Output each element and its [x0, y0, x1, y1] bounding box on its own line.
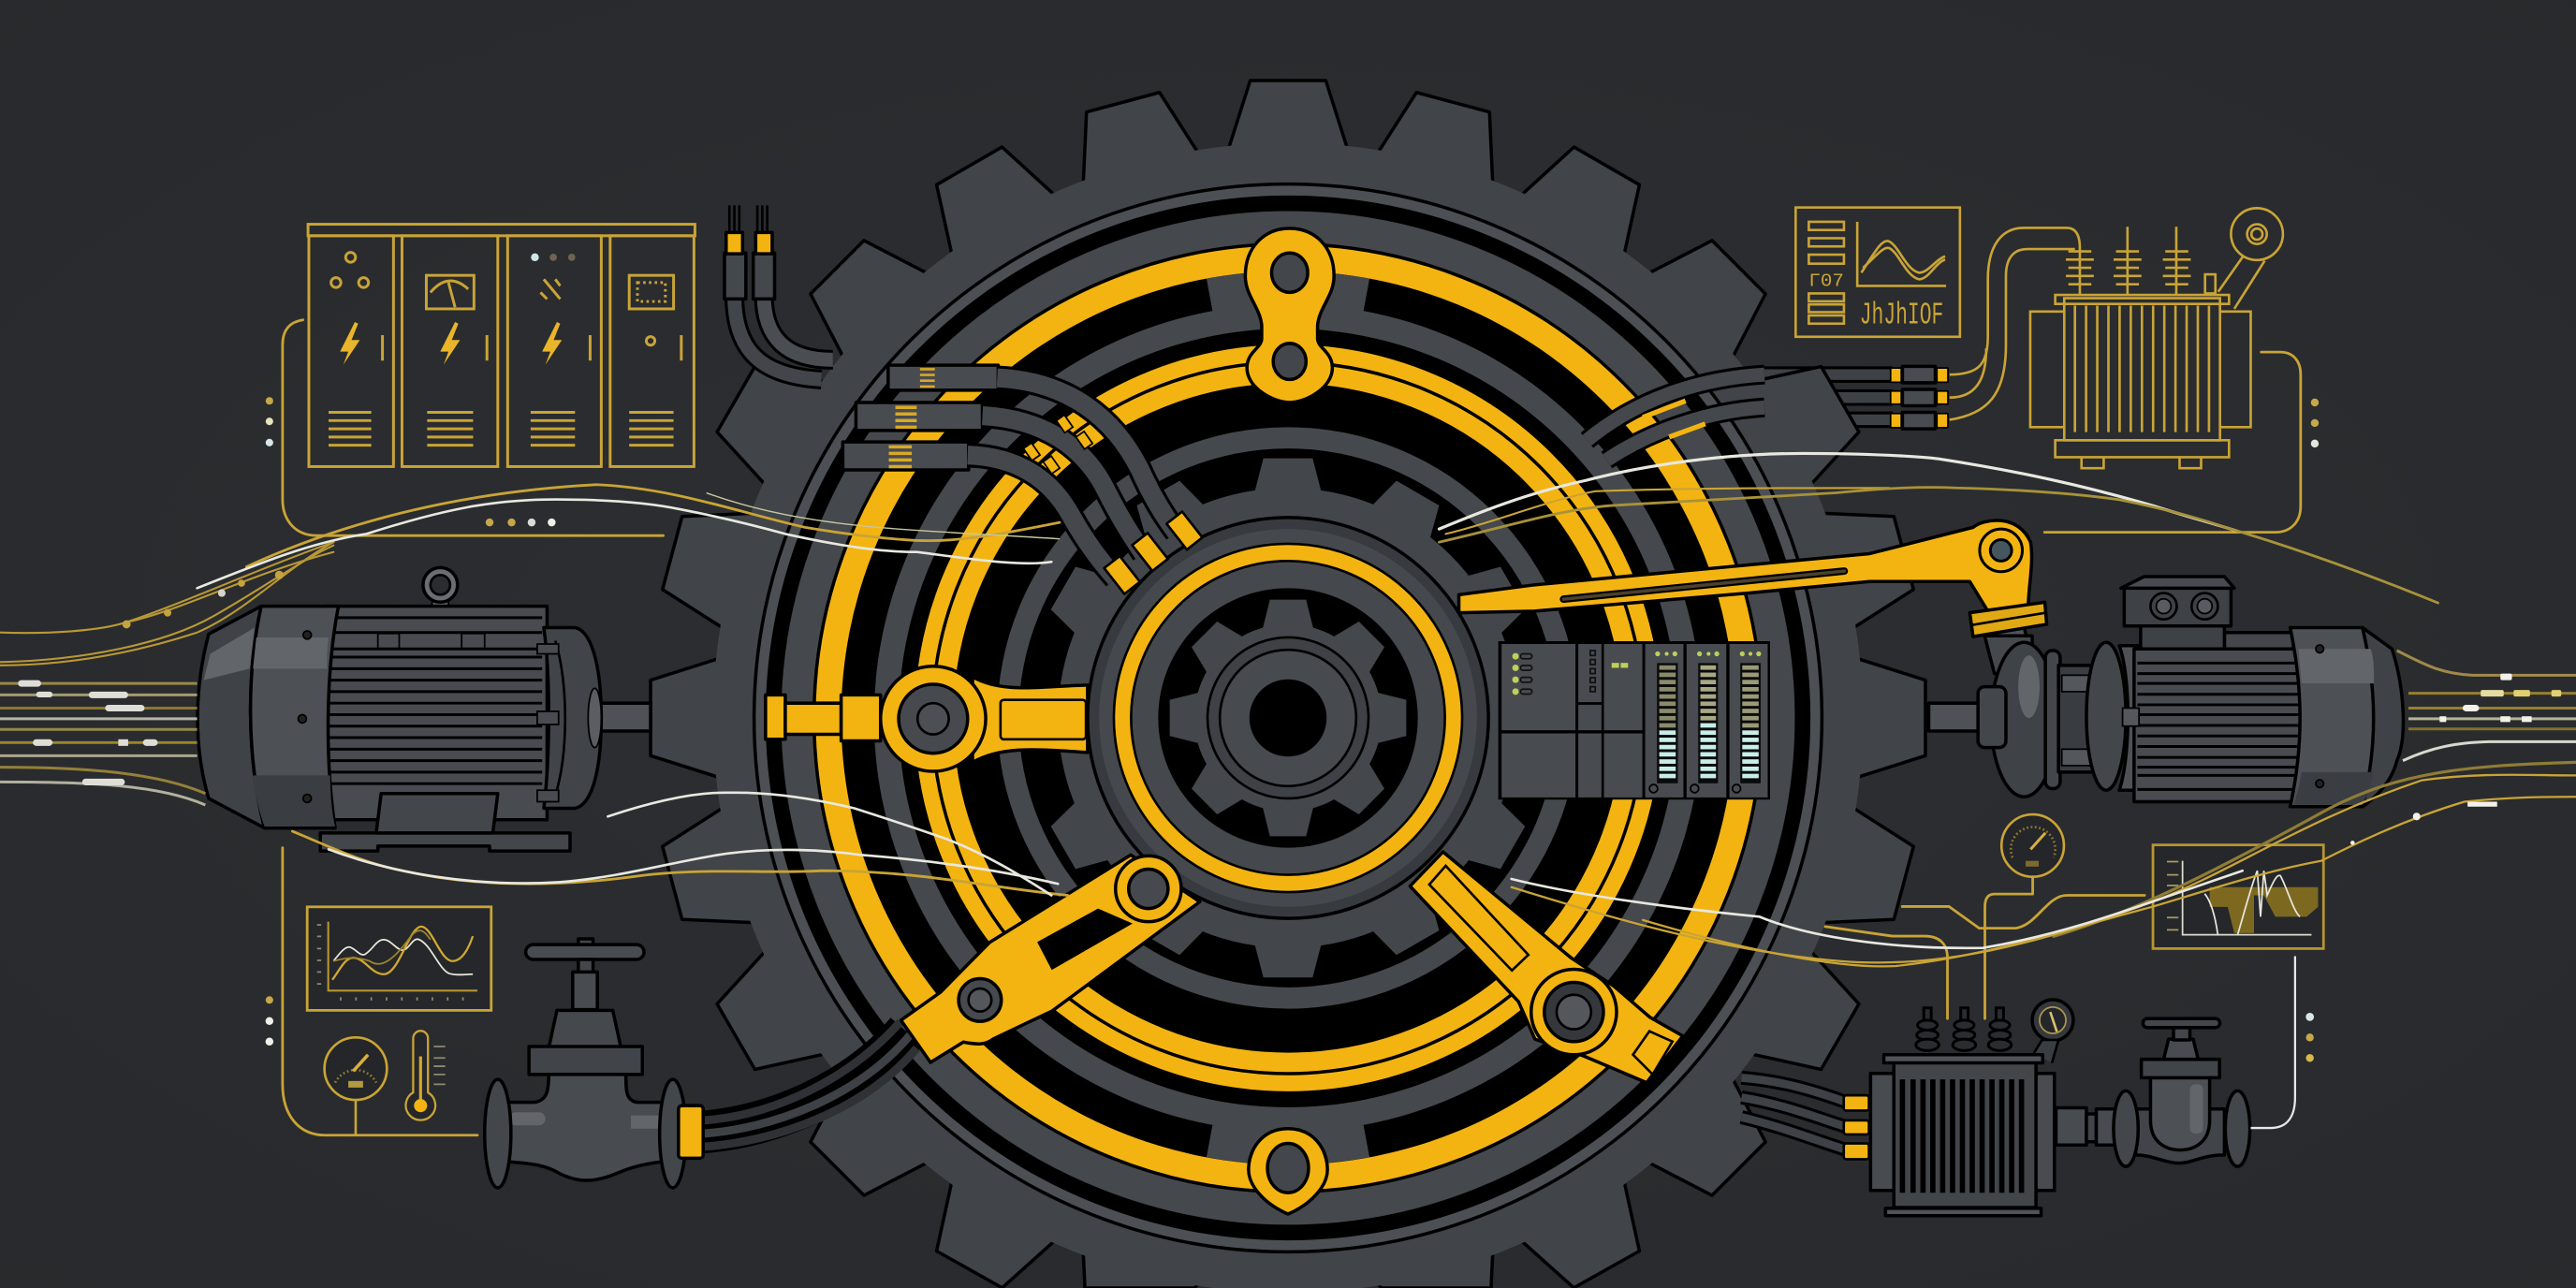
gauge dial: [2001, 814, 2064, 877]
left yellow arm: [766, 666, 1088, 771]
motor shaft: [594, 703, 651, 731]
lower right valve: [2056, 1018, 2250, 1166]
axle face: [1220, 650, 1356, 786]
valve body: [2136, 1109, 2224, 1164]
indicator dots: lower right: [2305, 1013, 2314, 1061]
head ring: [1980, 529, 2023, 572]
arm recess: [1429, 866, 1529, 971]
black channel: [766, 196, 1810, 1240]
arm body: [1410, 852, 1683, 1083]
gauge and thermometer lower left: [325, 1031, 446, 1135]
dome highlight: [204, 627, 255, 681]
inner black gap: [899, 329, 1677, 1107]
gold strand: [292, 831, 1068, 896]
junction box: [2121, 577, 2234, 649]
upper hole: [1271, 253, 1308, 292]
bottom pivot: [1249, 1129, 1327, 1214]
axle hole: [1250, 680, 1326, 756]
transformer side panels: [2030, 312, 2250, 427]
chart frame: [2153, 845, 2323, 948]
cables: right connectors to gear: [1758, 374, 1893, 419]
fine strand: [707, 493, 1060, 539]
pivot bearing: [1544, 983, 1603, 1042]
cap highlight: [253, 637, 329, 668]
side lug: [2123, 708, 2139, 726]
black field: [955, 385, 1621, 1051]
end recess: [1633, 1032, 1673, 1075]
outgoing cable: [703, 1022, 916, 1147]
cable 1: [997, 378, 1177, 533]
rising gold strands: [0, 542, 333, 666]
thermometer: [406, 1031, 446, 1120]
bushings: [1916, 1008, 2012, 1050]
mid gear: [1046, 459, 1530, 977]
pivot pin: [1557, 995, 1591, 1030]
gauge needle: [2030, 833, 2045, 849]
valve bowl highlight: [2190, 1084, 2203, 1134]
gauge label: [2026, 861, 2039, 867]
upper pivot ring: [1116, 856, 1181, 922]
white strand lower: [329, 849, 1058, 884]
front end bell: [537, 627, 601, 809]
tank cap: [1884, 1055, 2042, 1063]
pipe highlight right: [631, 1116, 661, 1129]
terminal wires: [729, 205, 768, 233]
gold strand: [246, 485, 1060, 567]
cog teeth: [651, 80, 1925, 1288]
circuit line: lower left bracket: [283, 848, 477, 1135]
inner cable core: [1606, 407, 1764, 460]
transformer cap and base: [2056, 295, 2229, 468]
horizontal stream lines: [2397, 651, 2576, 761]
body keys: [378, 634, 485, 649]
finned body: [2134, 649, 2305, 801]
transformer fins: [1902, 1079, 2022, 1193]
cabinet 3: [507, 236, 601, 466]
left gate valve: [485, 939, 703, 1188]
valve stem: [2174, 1027, 2190, 1040]
modules: [1501, 644, 1767, 798]
yellow connector tips: [1891, 368, 1948, 428]
panel: right chart: [2153, 845, 2323, 948]
finned body: [326, 607, 547, 820]
status LEDs: [1513, 651, 1761, 695]
rod collar: [842, 695, 881, 741]
data streams: left: [0, 542, 333, 805]
cable 2: [983, 416, 1144, 553]
yellow segment: [1643, 401, 1705, 437]
PLC rack: [1499, 641, 1770, 799]
transformer tank: [1894, 1062, 2036, 1208]
white return line: [2250, 956, 2295, 1128]
arm to hub: [973, 677, 1088, 762]
side gauge: [2032, 1000, 2073, 1063]
data streams: right: [1512, 651, 2576, 966]
cables: three lines into hub: [842, 365, 1203, 594]
white strand: [1512, 871, 2243, 948]
transformer body: [2064, 299, 2220, 440]
pipe highlight: [509, 1112, 546, 1125]
cabinet 4: [610, 236, 694, 466]
horizontal bus line: [1902, 896, 2144, 929]
lower left yellow arm: [703, 855, 1200, 1147]
cap shade: [2293, 772, 2374, 805]
yellow dashes: [1023, 415, 1092, 474]
display chart: [1857, 222, 1946, 285]
axle rings: [1208, 637, 1368, 798]
transformer feed line: [1825, 927, 1947, 1018]
connector shrouds: [842, 365, 998, 470]
data streams: upper right: [1439, 453, 2438, 603]
tank base: [1885, 1208, 2042, 1216]
gauge stem: [355, 1100, 357, 1135]
outer yellow ring: [814, 244, 1762, 1192]
left electric motor: [198, 567, 651, 851]
chart axes: [2183, 861, 2311, 935]
base plate: [320, 833, 570, 851]
cap highlight: [2298, 649, 2374, 683]
head hole: [1990, 540, 2012, 561]
arm body: [900, 855, 1200, 1062]
hub outer disc: [1088, 518, 1488, 918]
cog body: [713, 143, 1863, 1288]
motor foot: [376, 794, 498, 833]
cabinet 1: [309, 236, 393, 466]
outer rim: [754, 184, 1822, 1251]
inner yellow ring: [914, 344, 1662, 1092]
panel: right data display: [1795, 208, 1960, 337]
indicator dots: upper left: [266, 397, 556, 526]
cabinet top bar: [308, 225, 695, 236]
pivot ring: [1531, 970, 1617, 1055]
pivot hole: [1267, 1144, 1309, 1193]
cap shade: [253, 775, 335, 827]
chart white curve: [333, 939, 473, 974]
white strand upper: [607, 793, 1051, 896]
ring bridges: [1207, 271, 1369, 1164]
right long yellow arm: [1459, 520, 2047, 674]
chart axes: [329, 922, 477, 990]
connector bodies: [724, 232, 775, 299]
lower pivot pin: [969, 988, 991, 1012]
strand beads: [123, 571, 284, 628]
cap ring: [251, 607, 339, 828]
chart tick marks: [2167, 862, 2178, 929]
valve handwheel: [526, 939, 644, 973]
side panels: [1870, 1074, 2055, 1191]
casing disc: [2045, 651, 2060, 788]
transformer wires: [1950, 227, 2080, 374]
lower hole: [1273, 344, 1306, 379]
outlet pipe: [2056, 1107, 2119, 1145]
chart tick marks: [317, 925, 463, 1001]
hub cavity: [1158, 588, 1418, 848]
black field around mid gear: [1018, 448, 1558, 988]
circuit line: upper left bracket: [283, 320, 664, 535]
rod end: [766, 695, 785, 739]
right electric motor with pump: [1928, 577, 2403, 807]
lower right transformer: [1741, 1000, 2073, 1216]
rod: [785, 703, 842, 735]
yellow ring division: [932, 362, 1644, 1074]
volute highlight: [2018, 655, 2040, 718]
yellow pipe collar: [679, 1105, 703, 1158]
black gap: [842, 271, 1734, 1164]
gauge scale: [2011, 827, 2056, 857]
arm slot: [1038, 910, 1131, 969]
gray ring: [781, 211, 1795, 1225]
lower right gauge: [2001, 814, 2064, 877]
pump shaft: [1928, 703, 1982, 731]
transformer outline: upper right: [1950, 208, 2283, 468]
incoming cables: [1741, 1077, 1847, 1150]
small gear: [1170, 600, 1406, 836]
front flange: [2086, 642, 2141, 790]
yellow collars: [1844, 1095, 1869, 1159]
collar: [1969, 602, 2047, 637]
gauge feed line: [1985, 877, 2033, 1018]
valve bonnet: [549, 1010, 621, 1048]
pressure gauge: [325, 1037, 387, 1100]
cables: upper right over cog: [1587, 374, 1764, 460]
bonnet: [2163, 1039, 2198, 1060]
lower pivot: [959, 979, 1002, 1021]
yellow cable collars: [1105, 512, 1203, 594]
white strand: [198, 500, 1051, 588]
bonnet flange: [2142, 1060, 2219, 1077]
chart fill: [2210, 887, 2318, 933]
white strand: [1439, 453, 2236, 531]
chart white trace: [2204, 871, 2300, 935]
hub yellow ring: [1114, 544, 1462, 892]
pump neck: [1984, 636, 2032, 674]
chart frame: [307, 907, 491, 1010]
handwheel: [2143, 1018, 2219, 1028]
arm and head: [1459, 520, 2032, 613]
indicator dots: upper right: [2311, 399, 2319, 447]
coupling: [2058, 666, 2095, 772]
horizontal stream lines: [0, 683, 205, 805]
stream particles: [18, 681, 157, 785]
level meter 1: [1649, 663, 1677, 793]
panel: switchgear cabinets: [308, 225, 695, 466]
indicator dots: lower left: [266, 996, 273, 1046]
joint ring: [881, 666, 986, 771]
transformer bushings: [2066, 227, 2190, 295]
chart gold curve: [332, 927, 473, 980]
circuit lines: lower right: [1825, 877, 2295, 1128]
display bars: [1808, 222, 1844, 324]
arm recess: [1001, 700, 1086, 739]
strand beads: [2350, 801, 2497, 845]
cap screws: [299, 631, 312, 802]
valve bowl: [2150, 1077, 2210, 1150]
circuit line: upper right bracket: [2044, 352, 2301, 533]
gold strand 2: [1439, 488, 2438, 603]
dome end cover: [2363, 627, 2403, 807]
second gray ring: [874, 304, 1702, 1132]
left flange: [2114, 1090, 2138, 1166]
cap ring: [2291, 627, 2374, 807]
third gray ring: [997, 427, 1579, 1009]
top body step: [2224, 633, 2293, 649]
joint bearing: [899, 684, 968, 754]
lower right yellow arm: [1410, 852, 1683, 1083]
transformer cooling fins: [2075, 305, 2209, 432]
upper pivot pin: [1129, 869, 1168, 909]
collar groove: [1971, 613, 2045, 625]
arm slot: [1563, 571, 1844, 599]
dome end cover: [198, 607, 265, 828]
cooling fins: [2137, 663, 2300, 789]
connector stripes: [889, 368, 935, 468]
rack frame: [1499, 641, 1770, 799]
display small label: Г07: [1808, 271, 1844, 291]
bonnet flange: [529, 1046, 642, 1075]
level meter 2: [1690, 663, 1718, 793]
cable 3: [968, 455, 1116, 578]
left flange: [485, 1079, 511, 1188]
pump flange: [1978, 687, 2006, 748]
eye bolt: [423, 567, 458, 609]
cable pair: [735, 296, 833, 379]
hub inner face: [1131, 561, 1445, 875]
gray connector bodies: [1902, 366, 1936, 429]
valve body: [506, 1075, 664, 1180]
right flange: [2225, 1090, 2250, 1166]
right flange: [660, 1079, 686, 1188]
link body: [1245, 228, 1334, 402]
connecting neck: [1988, 627, 2037, 674]
joint pin: [917, 703, 949, 735]
conservator tank: [2205, 208, 2283, 309]
chart secondary gold curve: [333, 930, 431, 964]
central hub: [1088, 518, 1488, 918]
stream particles: [2439, 674, 2561, 722]
cooling fins: [327, 618, 542, 783]
LED labels: [1520, 651, 1595, 695]
pivot body: [1249, 1129, 1327, 1214]
gold strand 1: [1445, 488, 1889, 534]
data streams: upper left over cog: [198, 485, 1060, 588]
outer cable: [1587, 374, 1764, 440]
inner cable: [1606, 407, 1764, 460]
outer cable core: [1587, 374, 1764, 440]
large cog wheel: [651, 80, 1925, 1288]
top link pivot: [1245, 228, 1334, 402]
data streams: lower left over cog: [292, 793, 1068, 896]
panel: left chart: [307, 907, 491, 1010]
cables: upper left connectors into cog: [724, 205, 833, 379]
cap screws: [2316, 645, 2323, 787]
volute casing: [1991, 642, 2056, 797]
cabinet 2: [402, 236, 498, 466]
arm slot fill: [1563, 571, 1844, 599]
lower right gold strands: [1512, 762, 2576, 966]
right connectors: [1891, 366, 1948, 429]
valve stem: [573, 972, 597, 1010]
hub face: [1099, 529, 1477, 907]
level meter 3: [1733, 663, 1761, 793]
display label: JhJhIOF: [1860, 299, 1943, 334]
